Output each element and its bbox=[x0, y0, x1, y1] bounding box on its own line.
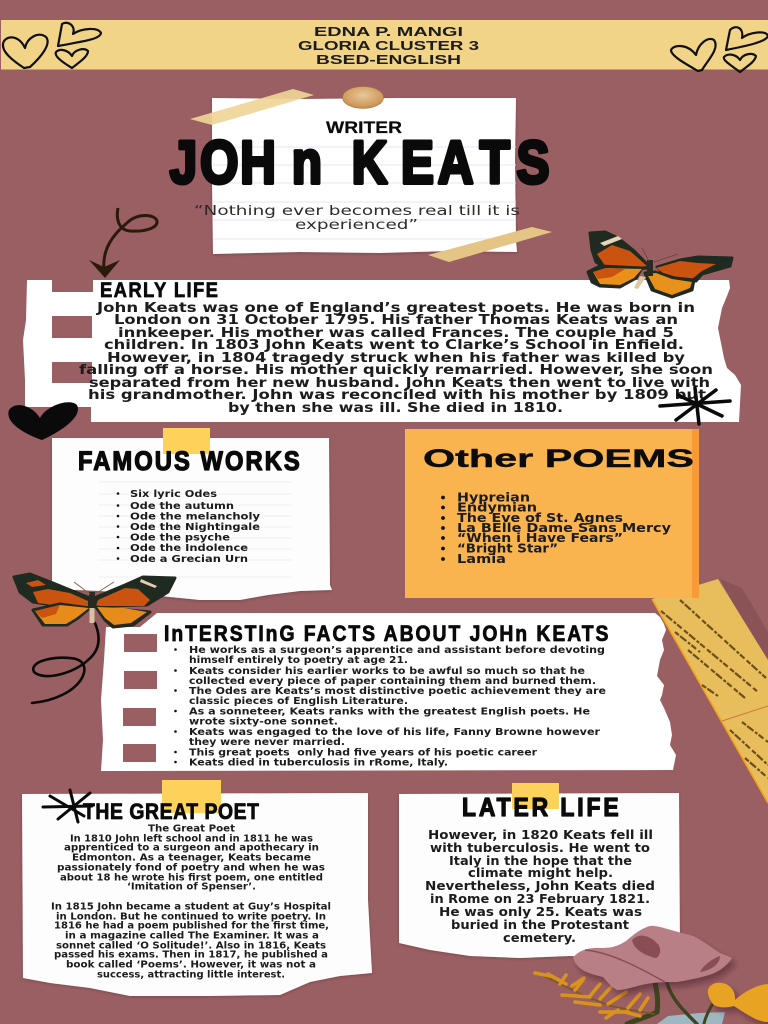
heading: famous works: FAMOUS WORKS bbox=[78, 447, 300, 476]
icon: squiggle line bbox=[32, 623, 99, 703]
quote: “Nothing ever becomes real till it is bbox=[194, 204, 520, 219]
icon: butterfly left bbox=[14, 574, 175, 627]
famous works list: Ode the Nightingale bbox=[130, 522, 260, 533]
author details: BSED-ENGLISH bbox=[316, 52, 461, 67]
facts list: collected every piece of paper containing them and burned them. bbox=[189, 676, 596, 687]
icon: asterisk star bbox=[43, 790, 92, 822]
pink flower bbox=[573, 926, 732, 990]
later life text: Nevertheless, John Keats died bbox=[425, 879, 655, 893]
facts list: This great poets only had five years of his poetic career bbox=[189, 748, 537, 758]
later life text: buried in the Protestant bbox=[451, 918, 629, 932]
facts list: wrote sixty-one sonnet. bbox=[189, 716, 338, 728]
great poet text: about 18 he wrote his first poem, one entitled bbox=[60, 872, 323, 884]
author details: GLORIA CLUSTER 3 bbox=[298, 38, 479, 53]
other poems list: Lamia bbox=[457, 552, 506, 566]
heading: later life: LATER LIFE bbox=[462, 794, 619, 822]
panel: the great poet bbox=[22, 780, 372, 996]
panel: other poems bbox=[405, 429, 699, 598]
other poems list bbox=[441, 490, 671, 566]
great poet text: In 1815 John became a student at Guy’s Hospital bbox=[51, 902, 331, 912]
great poet text: in a magazine called The Examiner. It was a bbox=[65, 930, 319, 942]
facts list: Keats was engaged to the love of his life, Fanny Browne however bbox=[189, 727, 600, 738]
famous works list: Ode the Indolence bbox=[130, 543, 248, 554]
later life text: He was only 25. Keats was bbox=[439, 905, 642, 919]
later life text: Italy in the hope that the bbox=[449, 854, 632, 868]
great poet text: success, attracting little interest. bbox=[97, 970, 285, 980]
writer label: WRITER bbox=[326, 118, 402, 137]
facts list: himself entirely to poetry at age 21. bbox=[189, 655, 408, 666]
early life text: innkeeper. His mother was called Frances. The couple had 5 bbox=[118, 326, 674, 341]
main title: JOHn KEATS bbox=[170, 128, 549, 196]
other poems list: The Eve of St. Agnes bbox=[457, 511, 623, 525]
famous works list bbox=[117, 489, 261, 565]
icon: hearts right bbox=[671, 27, 768, 72]
header banner bbox=[1, 20, 768, 72]
early life text bbox=[79, 301, 713, 416]
heading: early life: EARLY LIFE bbox=[100, 279, 218, 302]
famous works list: Ode the autumn bbox=[130, 501, 234, 512]
early life text: by then she was ill. She died in 1810. bbox=[228, 401, 563, 416]
panel: famous works bbox=[52, 428, 332, 600]
panel: interesting facts bbox=[101, 613, 676, 771]
famous works list: Ode a Grecian Urn bbox=[130, 554, 248, 565]
later life text: cemetery. bbox=[503, 931, 576, 945]
great poet text: The Great Poet bbox=[148, 824, 235, 834]
icon: butterfly top bbox=[588, 232, 732, 297]
tape note bbox=[163, 428, 210, 454]
famous works list: Ode the melancholy bbox=[130, 512, 261, 522]
title note bbox=[170, 86, 552, 262]
great poet text: passed his exams. Then in 1817, he published a bbox=[54, 950, 328, 960]
stems bbox=[627, 983, 712, 1024]
other poems list: La BElle Dame Sans Mercy bbox=[457, 521, 671, 535]
early life text: falling off a horse. His mother quickly remarried. However, she soon bbox=[79, 363, 713, 378]
great poet text: sonnet called ‘O Solitude!’. Also in 1816, Keats bbox=[56, 940, 326, 952]
heading: interesting facts: InTERSTInG FACTS ABOUT JOHn KEATS bbox=[164, 622, 609, 646]
early life text: However, in 1804 tragedy struck when his father was killed by bbox=[107, 351, 686, 366]
great poet text bbox=[51, 824, 331, 980]
tape note bbox=[512, 783, 559, 809]
panel: later life bbox=[399, 783, 680, 958]
heading: other poems: Other POEMS bbox=[423, 445, 694, 473]
heading: the great poet: THE GREAT POET bbox=[83, 800, 259, 824]
other poems list: “When i Have Fears” bbox=[457, 531, 623, 545]
quote bbox=[194, 204, 520, 233]
facts list: Keats died in tuberculosis in rRome, Italy. bbox=[189, 758, 448, 768]
early life text: John Keats was one of England’s greatest poets. He was born in bbox=[96, 301, 695, 316]
other poems list: Hypreian bbox=[457, 490, 530, 504]
tape bottom bbox=[428, 227, 552, 262]
icon: asterisk star bbox=[660, 388, 730, 424]
great poet text: In 1810 John left school and in 1811 he was bbox=[70, 834, 313, 844]
great poet text: book called ‘Poems’. However, it was not a bbox=[66, 960, 316, 970]
later life text bbox=[425, 828, 655, 945]
great poet text: passionately fond of poetry and when he was bbox=[57, 862, 325, 874]
panel: early life bbox=[23, 279, 741, 422]
facts list: He works as a surgeon’s apprentice and assistant before devoting bbox=[189, 645, 605, 656]
icon: black heart bbox=[8, 402, 78, 440]
orange flower bbox=[708, 983, 768, 1022]
early life text: children. In 1803 John Keats went to Clarke’s School in Enfield. bbox=[104, 338, 684, 353]
quote: experienced” bbox=[295, 218, 418, 233]
other poems list: Endymian bbox=[457, 500, 537, 514]
icon: hearts left bbox=[3, 23, 101, 68]
later life text: However, in 1820 Keats fell ill bbox=[428, 828, 653, 842]
later life text: with tuberculosis. He went to bbox=[430, 841, 650, 855]
icon: flowers bbox=[535, 926, 768, 1024]
facts list: they were never married. bbox=[189, 737, 345, 748]
great poet text: 1816 he had a poem published for the first time, bbox=[54, 920, 329, 932]
author details: EDNA P. MANGI bbox=[314, 24, 463, 39]
author details bbox=[298, 24, 479, 67]
tape top bbox=[190, 89, 314, 125]
decorative manuscript strip bbox=[652, 579, 768, 803]
facts list: The Odes are Keats’s most distinctive poetic achievement they are bbox=[189, 686, 606, 697]
facts list bbox=[174, 645, 606, 768]
arrow: curly arrow to early life bbox=[89, 208, 157, 278]
leaf bbox=[657, 1012, 725, 1024]
great poet text: apprenticed to a surgeon and apothecary in bbox=[64, 842, 319, 854]
tape note bbox=[162, 780, 221, 813]
famous works list: Six lyric Odes bbox=[130, 489, 217, 500]
early life text: separated from her new husband. John Keats then went to live with bbox=[89, 376, 710, 391]
later life text: climate might help. bbox=[468, 866, 613, 880]
sprig bbox=[535, 972, 654, 1018]
great poet text: Edmonton. As a teenager, Keats became bbox=[72, 852, 311, 864]
great poet text: ‘Imitation of Spenser’. bbox=[127, 882, 256, 892]
facts list: classic pieces of English Literature. bbox=[189, 696, 408, 707]
facts list: As a sonneteer, Keats ranks with the greatest English poets. He bbox=[189, 706, 590, 718]
facts list: Keats consider his earlier works to be awful so much so that he bbox=[189, 666, 585, 677]
other poems list: “Bright Star” bbox=[457, 542, 558, 556]
great poet text: in London. But he continued to write poetry. In bbox=[56, 912, 326, 922]
pin bbox=[342, 86, 384, 108]
famous works list: Ode the psyche bbox=[130, 532, 230, 544]
early life text: his grandmother. John was reconciled with his mother by 1809 but bbox=[88, 388, 706, 403]
paper sheet bbox=[212, 98, 517, 254]
later life text: in Rome on 23 February 1821. bbox=[430, 892, 650, 906]
early life text: London on 31 October 1795. His father Thomas Keats was an bbox=[114, 313, 678, 328]
